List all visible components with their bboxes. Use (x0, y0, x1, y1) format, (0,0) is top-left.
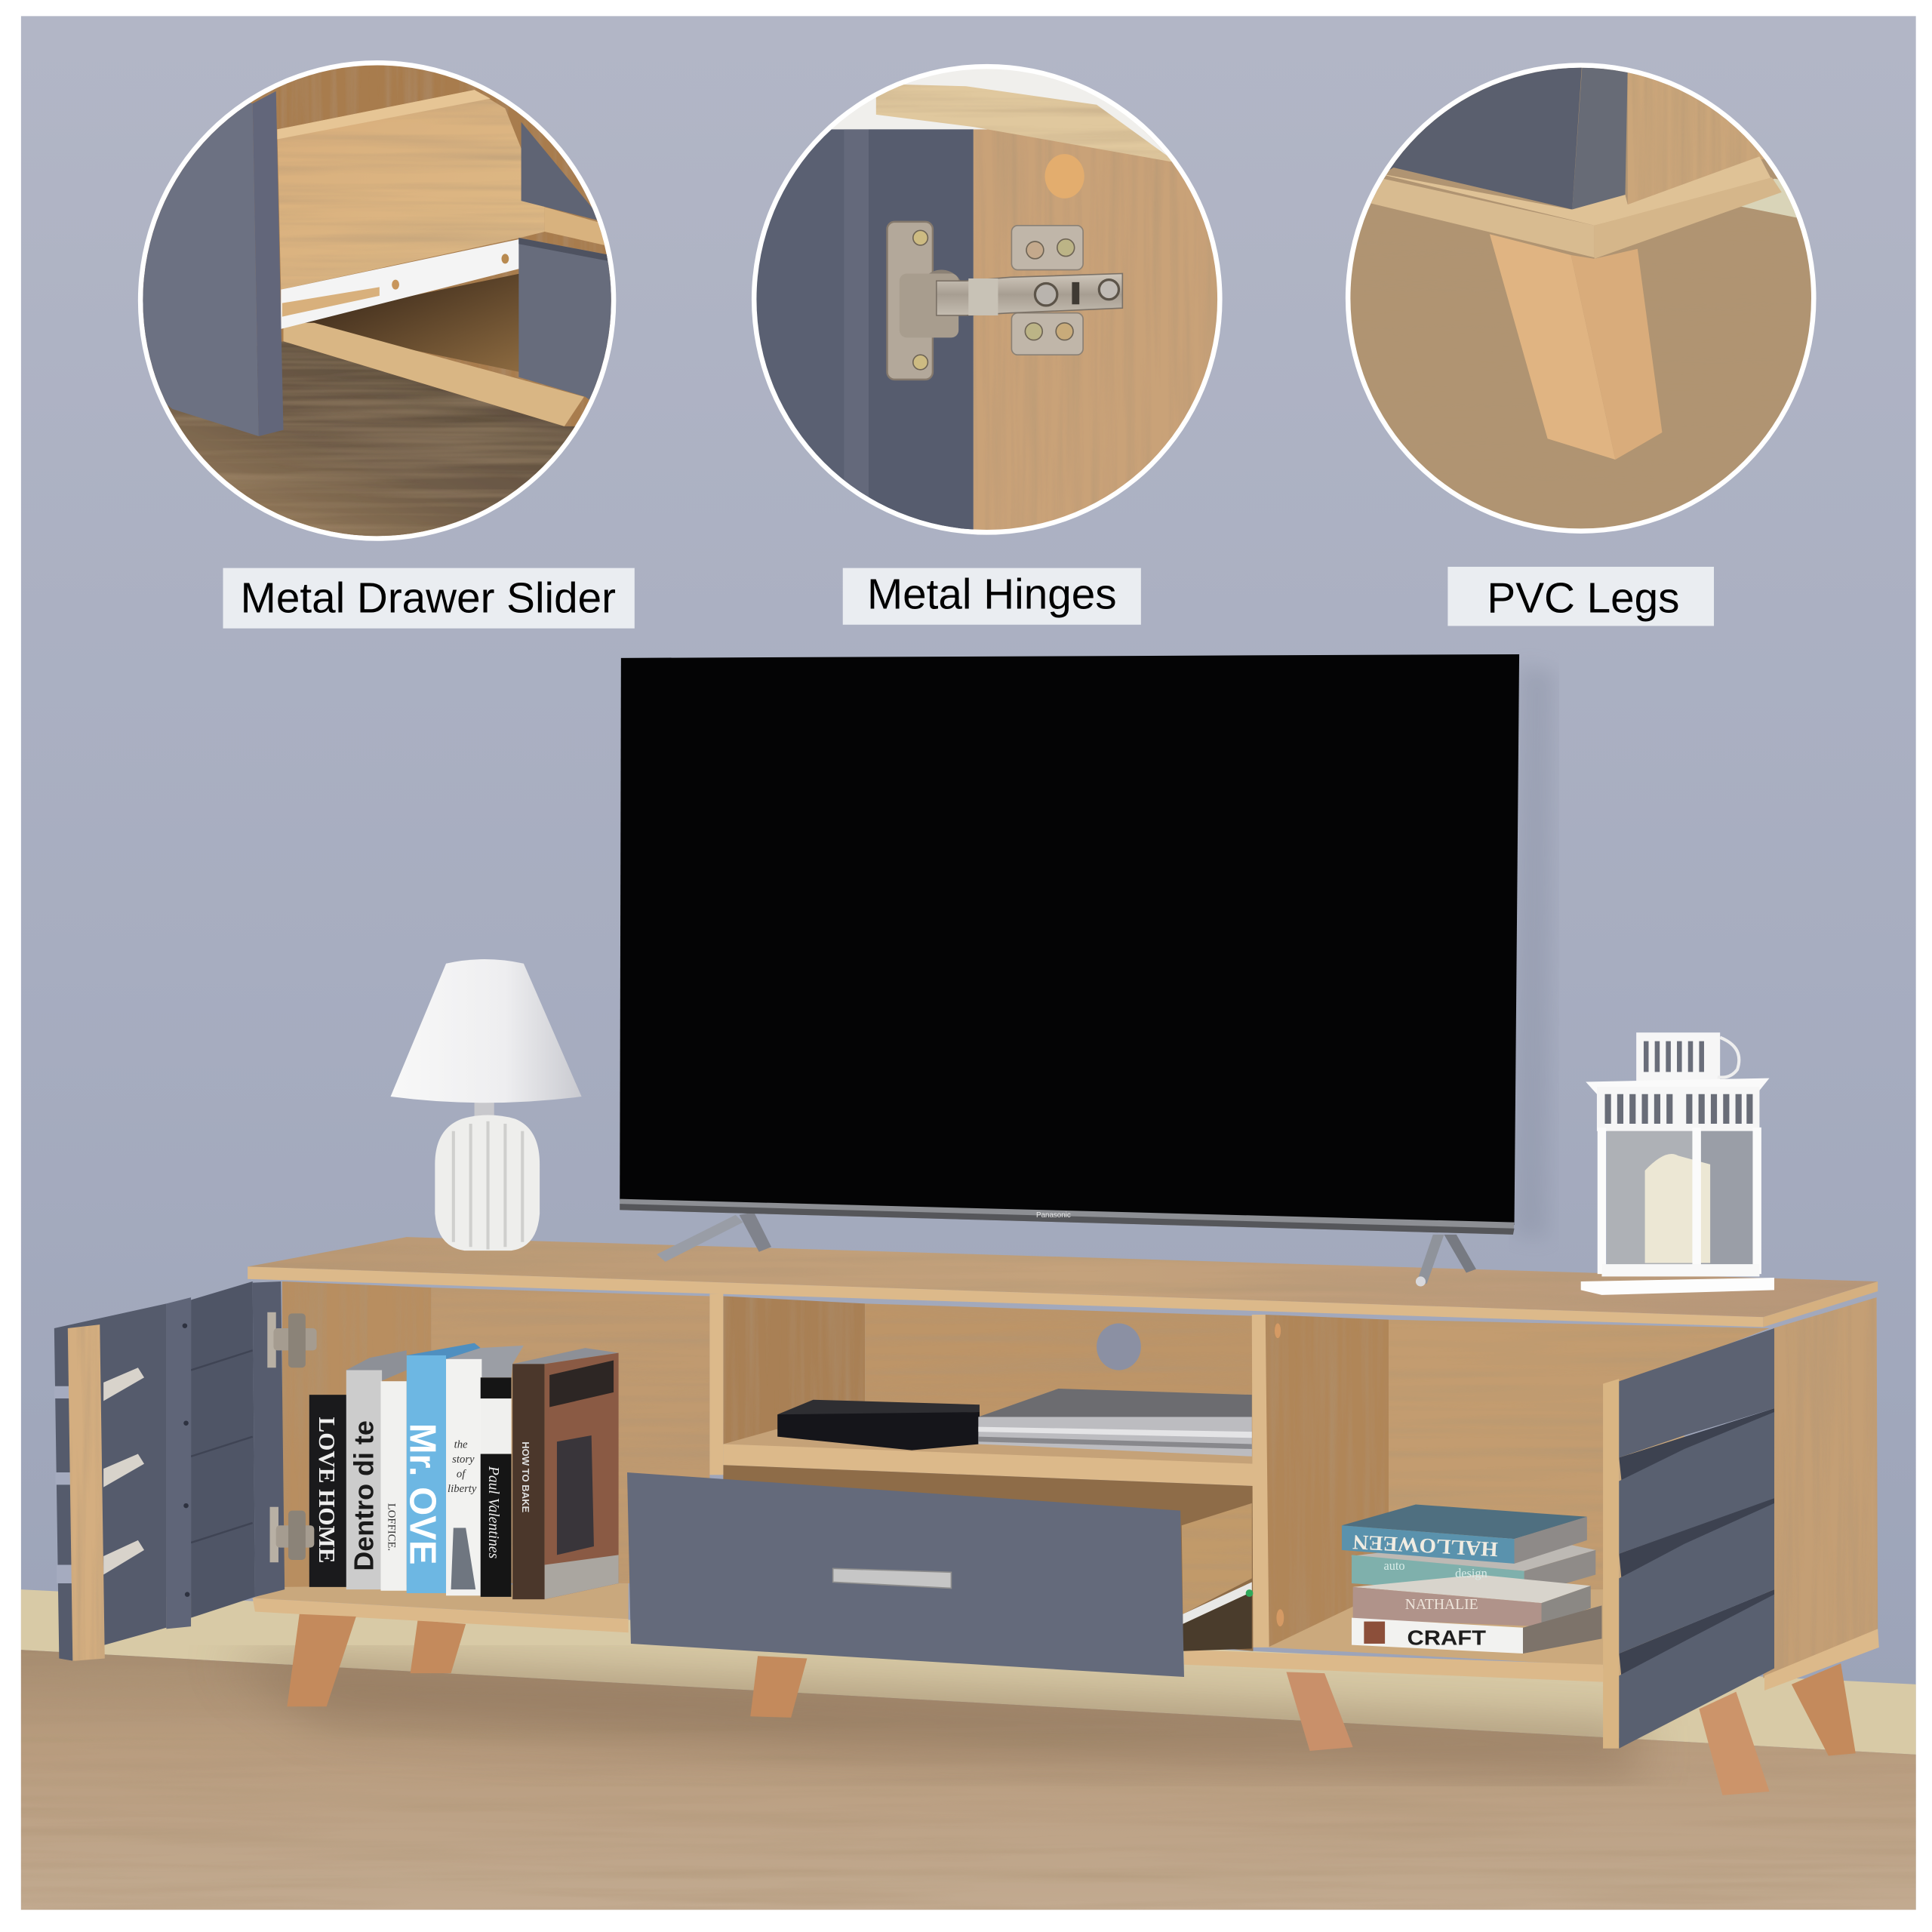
detail circle: metal drawer slider (123, 55, 629, 549)
left books: LOVE HOME (314, 1417, 340, 1563)
skirting board (21, 1589, 1916, 1755)
left books: the (454, 1438, 468, 1451)
right books: HALLOWEEN (1352, 1530, 1499, 1561)
right compartment (1184, 1315, 1769, 1682)
hinge hardware (888, 222, 1122, 380)
right books: CRAFT (1407, 1626, 1486, 1650)
door hinges (267, 1312, 317, 1562)
left books: Mr. OVE (402, 1423, 443, 1564)
dividers (709, 1294, 1269, 1647)
left books: story (452, 1454, 475, 1466)
left books: Dentro di te (349, 1420, 380, 1571)
legs: front (287, 1614, 1769, 1795)
lantern (1581, 1032, 1774, 1295)
left open door (54, 1281, 317, 1661)
cabinet top edge (248, 1266, 1878, 1327)
tv stand cabinet (54, 1237, 1879, 1795)
legs: rear (411, 1620, 1856, 1756)
drawer (627, 1472, 1253, 1677)
left books: Paul Valentines (485, 1466, 501, 1559)
left compartment (253, 1281, 709, 1632)
right side bottom edge (1764, 1629, 1879, 1690)
label: Metal Hinges: Metal Hinges (867, 571, 1117, 619)
left books (309, 1343, 619, 1599)
right books: auto (1383, 1558, 1405, 1573)
television: Panasonic (1036, 1211, 1071, 1220)
table lamp (391, 959, 582, 1251)
right books: NATHALIE (1405, 1597, 1478, 1613)
cabinet top surface (248, 1237, 1878, 1317)
floor shadow under stand (222, 1657, 1638, 1774)
television (620, 654, 1555, 1286)
center compartment (723, 1297, 1253, 1651)
drawer handle (833, 1568, 951, 1588)
left books: HOW TO BAKE (520, 1441, 531, 1512)
label: PVC Legs (1447, 567, 1714, 626)
right open door (1603, 1328, 1774, 1749)
right books: design (1455, 1566, 1487, 1580)
left books: of (457, 1469, 466, 1481)
detail circle: metal hinges (746, 62, 1232, 542)
wooden floor (21, 1650, 1916, 1910)
label: Metal Drawer Slider: Metal Drawer Slider (241, 574, 616, 622)
left books: LOFFICE. (385, 1503, 397, 1551)
label: PVC Legs: PVC Legs (1487, 574, 1679, 622)
right side panel (1763, 1297, 1878, 1678)
left books: liberty (448, 1483, 477, 1495)
detail circle: PVC legs (1343, 62, 1823, 542)
media devices (777, 1389, 1252, 1457)
right books (1342, 1504, 1601, 1654)
